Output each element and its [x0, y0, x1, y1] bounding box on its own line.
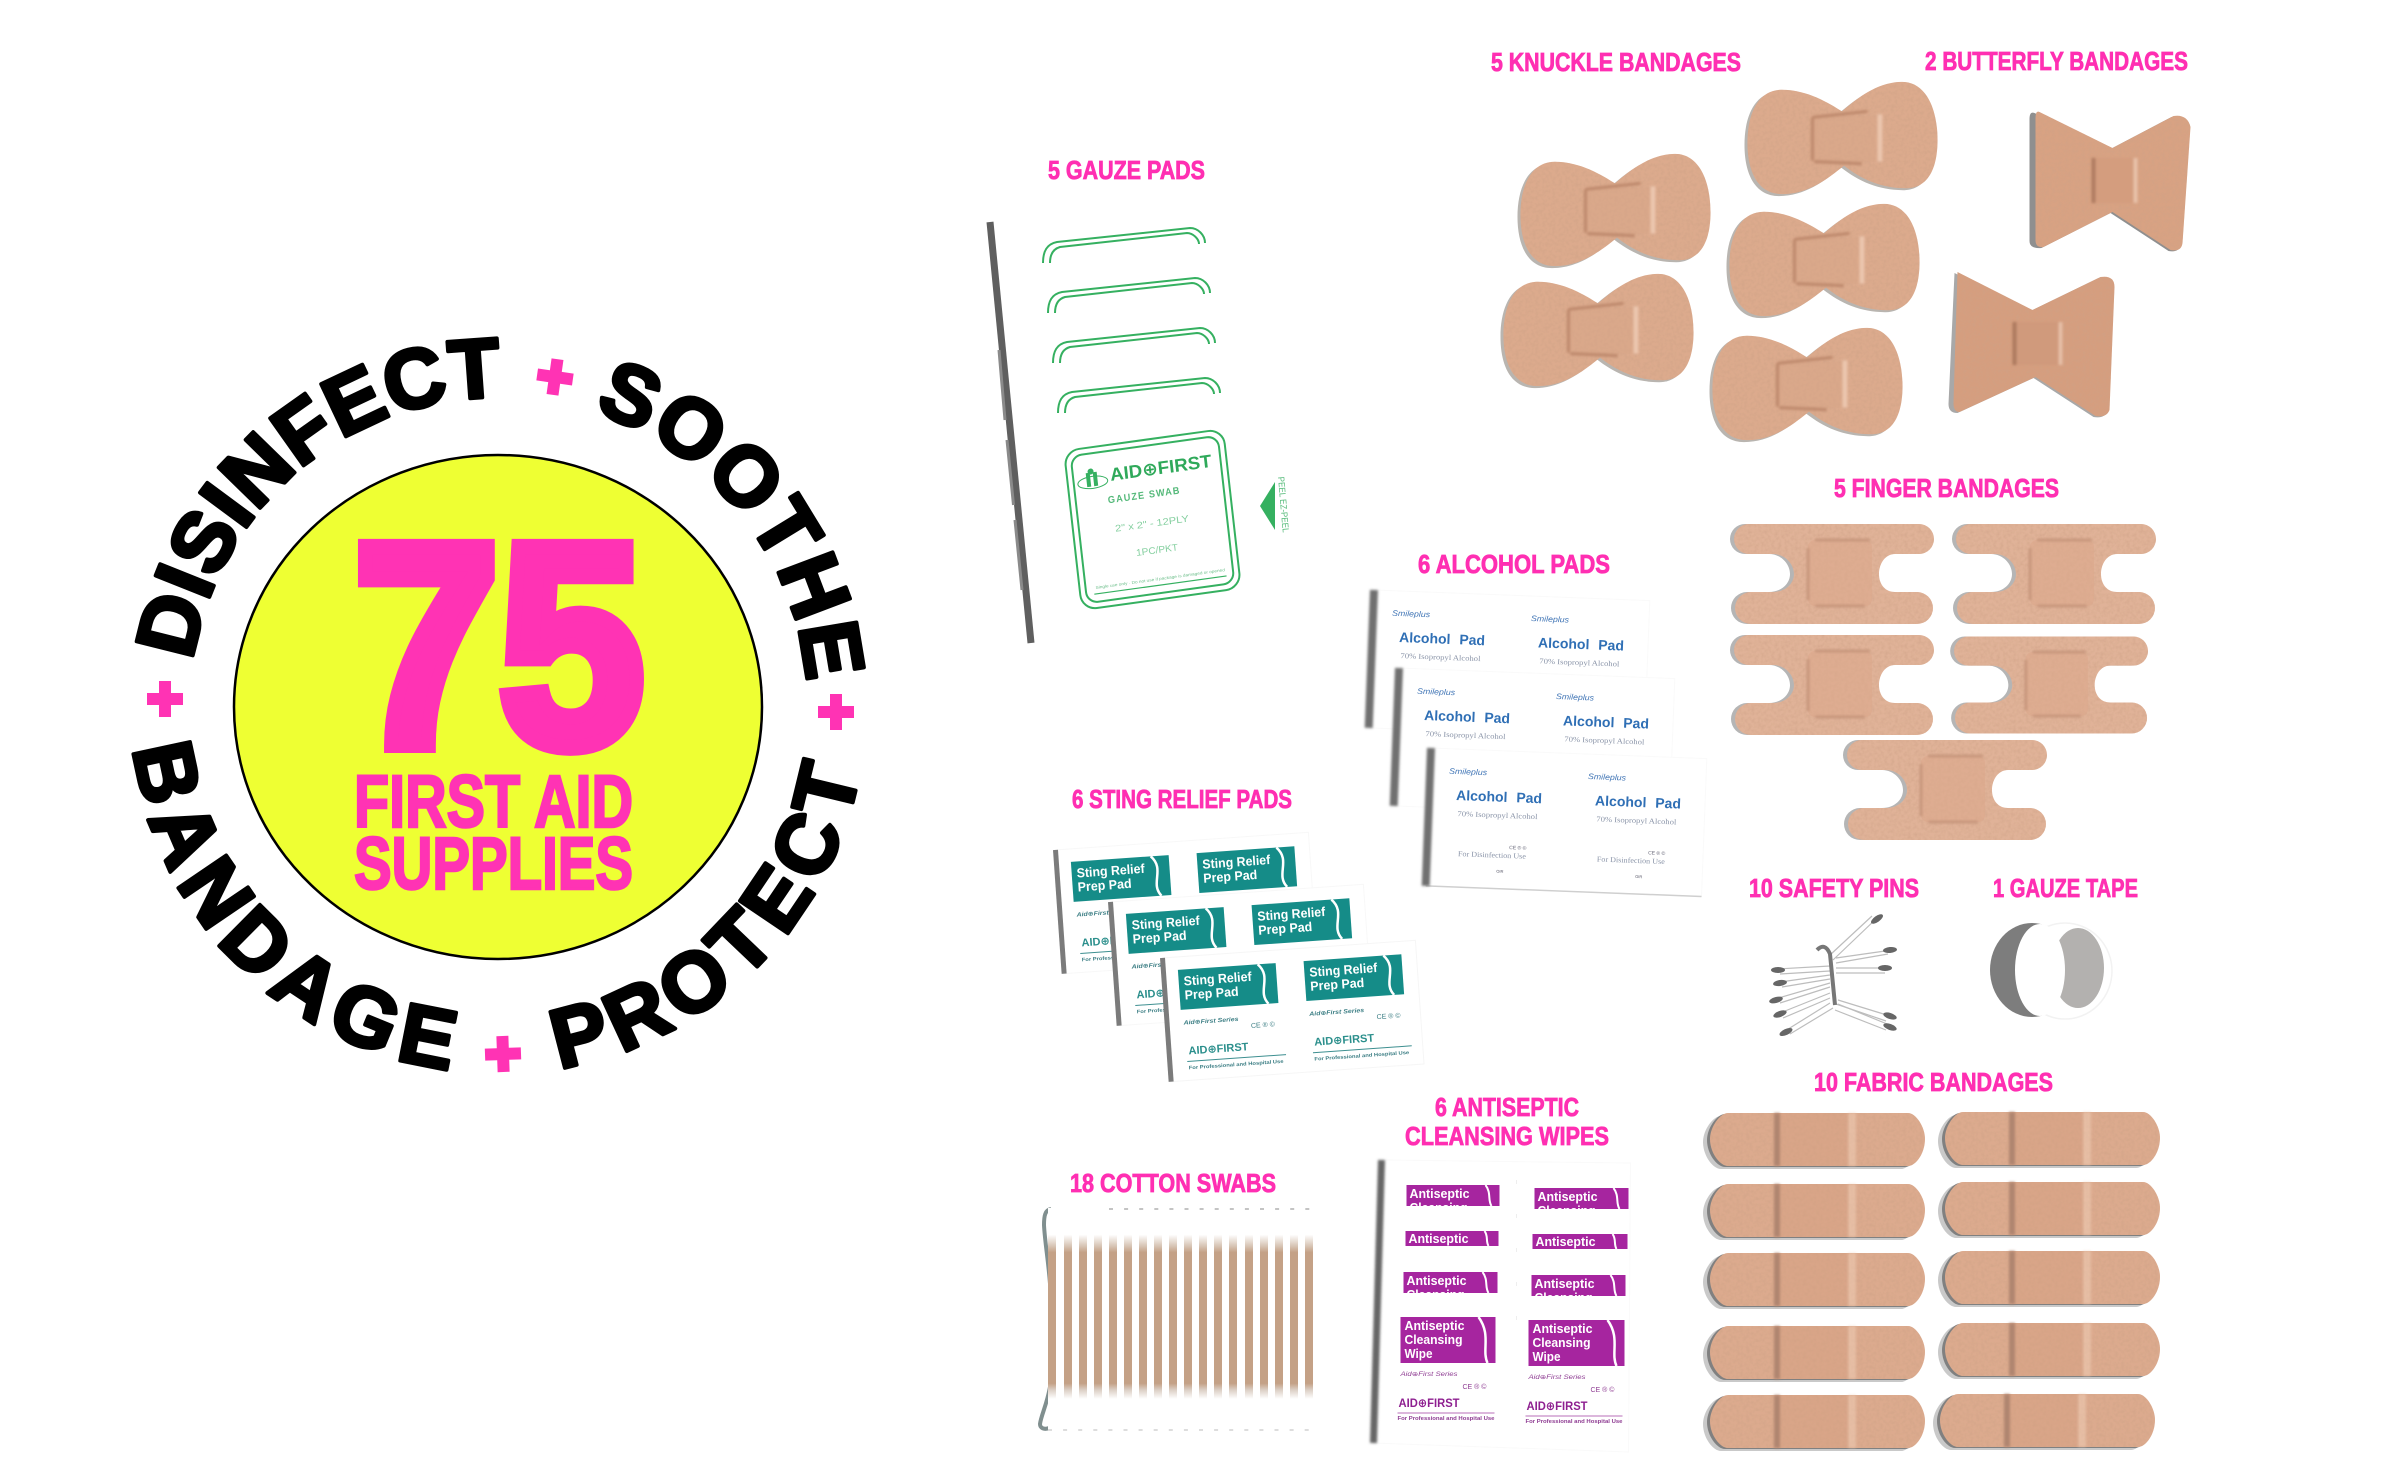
panel: antiseptic wipes [1374, 1092, 1630, 1452]
sting pad strip back [1053, 832, 1317, 974]
butterfly bandage lower [1948, 272, 2114, 417]
gauze label frame: 1PC/PKT [1136, 542, 1179, 559]
magenta label right 3 [1532, 1275, 1626, 1296]
peel text: PEEL EZ-PEEL [1276, 476, 1291, 533]
panel: butterfly bandages [1925, 46, 2190, 417]
fabric bandages group [1703, 1112, 2160, 1451]
badge: 75 first aid supplies [131, 336, 866, 1072]
product footer right [1526, 1375, 1623, 1425]
sting pad strip front: Prep Pad [1184, 984, 1239, 1002]
sting pad strip back: Sting Relief [1076, 861, 1146, 881]
alcohol pad strip back: Alcohol Pad [1399, 629, 1485, 648]
pin bundle [1768, 913, 1898, 1038]
alcohol pad strip front: CE ® © [1648, 849, 1666, 857]
heading: 5 KNUCKLE BANDAGES [1491, 47, 1741, 77]
sting pad strip front: Aid⊕First Series [1182, 1017, 1239, 1027]
magenta label right 4 [1528, 1320, 1624, 1366]
product footer left: Aid⊕First Series [1399, 1372, 1458, 1378]
sting pad strip middle: For Professional and Hospital Use [1137, 1003, 1232, 1015]
alcohol pad strip front: Smileplus [1588, 772, 1626, 783]
product footer right: CE ® © [1590, 1386, 1615, 1394]
alcohol pad strip back [1365, 590, 1650, 738]
sting pad strip middle: Aid⊕First Series [1130, 961, 1187, 971]
alcohol pad strip front: Alcohol Pad [1595, 792, 1681, 812]
gauze label frame: 2" x 2" - 12PLY [1115, 513, 1190, 535]
alcohol pad strip front: Smileplus [1449, 767, 1487, 777]
sting pad strip back: Aid⊕First Series [1075, 909, 1132, 919]
product footer left: For Professional and Hospital Use [1398, 1416, 1495, 1422]
panel: cotton swabs [1040, 1168, 1313, 1430]
peel arrow [1260, 482, 1275, 530]
magenta label left 2: Antiseptic [1408, 1231, 1468, 1246]
alcohol pad strip middle: 70% Isopropyl Alcohol [1425, 729, 1506, 741]
alcohol pad strip front: For Disinfection Use [1458, 849, 1527, 861]
heading line one: 6 ANTISEPTIC [1435, 1092, 1579, 1122]
sting pad strip middle: Sting Relief [1131, 913, 1201, 933]
product footer left: CE ® © [1462, 1383, 1487, 1391]
sting pad strip back: Prep Pad [1077, 876, 1132, 894]
panel: safety pins [1749, 873, 1919, 1038]
panel: sting relief pads [1053, 784, 1424, 1082]
sting pad strip front: Aid⊕First Series [1308, 1008, 1365, 1018]
sting pad strip front: For Professional and Hospital Use [1314, 1050, 1410, 1063]
alcohol pad strip front: For Disinfection Use [1597, 854, 1666, 866]
magenta label right 1: Cleansing [1538, 1203, 1596, 1218]
gauze packet [990, 190, 1303, 644]
wipes packet [1374, 1160, 1630, 1452]
sting pad strip front [1160, 940, 1424, 1082]
product footer right: AID⊕FIRST [1526, 1399, 1588, 1413]
heading: 10 FABRIC BANDAGES [1814, 1067, 2053, 1097]
alcohol pad strip middle: 70% Isopropyl Alcohol [1564, 734, 1645, 746]
heading: 5 FINGER BANDAGES [1834, 473, 2059, 503]
alcohol pad strip middle: Smileplus [1417, 687, 1455, 697]
sting pad strip front: CE ® © [1376, 1011, 1402, 1021]
alcohol pad strip front: 70% Isopropyl Alcohol [1596, 814, 1677, 826]
magenta label right 4: Antiseptic [1532, 1321, 1592, 1336]
heading: 1 GAUZE TAPE [1993, 873, 2138, 903]
magenta label left 4: Cleansing [1404, 1332, 1463, 1347]
alcohol pad strip front: OIR [1635, 874, 1643, 879]
swab bundle [1040, 1208, 1313, 1430]
pink plus: bottom [484, 1035, 522, 1073]
sting pad strip front: Sting Relief [1183, 969, 1253, 989]
knuckle bandages group [1500, 82, 1938, 442]
sting pad strip back: AID⊕FIRST [1081, 933, 1142, 949]
heading: 18 COTTON SWABS [1070, 1168, 1276, 1198]
sting pad strip front: AID⊕FIRST [1188, 1041, 1249, 1057]
magenta label left 4: Antiseptic [1404, 1318, 1464, 1333]
butterfly bandage upper [2030, 112, 2190, 251]
product footer right: Aid⊕First Series [1527, 1375, 1586, 1381]
gauze label frame: AID⊕FIRST [1109, 451, 1213, 485]
tape roll [1990, 923, 2112, 1019]
heading: 5 GAUZE PADS [1048, 155, 1205, 185]
sting pad strip middle: Prep Pad [1132, 928, 1187, 946]
sting pad strip front: CE ® © [1251, 1020, 1276, 1030]
pink plus: right [818, 694, 854, 730]
product footer right: For Professional and Hospital Use [1526, 1419, 1623, 1425]
magenta label right 3: Antiseptic [1534, 1276, 1594, 1291]
sting pad strip middle: AID⊕FIRST [1136, 985, 1197, 1001]
sting pad strip back: For Professional and Hospital Use [1082, 951, 1177, 963]
sting pad strip middle: Sting Relief [1257, 904, 1326, 924]
magenta label left 2 [1406, 1231, 1498, 1246]
magenta label right 4: Wipe [1532, 1349, 1560, 1364]
magenta label right 4: Cleansing [1532, 1335, 1591, 1350]
ring word: disinfect: DISINFECT [134, 336, 500, 658]
panel: gauze tape [1990, 873, 2138, 1019]
finger bandages group [1730, 524, 2156, 840]
number 75: 75 [354, 485, 644, 807]
magenta label right 2: Antiseptic [1536, 1234, 1596, 1249]
magenta label right 3: Cleansing [1534, 1290, 1593, 1305]
sting pad strip middle: Prep Pad [1258, 919, 1313, 938]
pink plus: top [535, 357, 575, 397]
alcohol pad strip middle: Smileplus [1556, 692, 1594, 703]
alcohol pad strip front: CE ® © [1509, 844, 1527, 852]
gauze label frame: GAUZE SWAB [1107, 485, 1181, 506]
alcohol pad strip middle: Alcohol Pad [1424, 707, 1510, 726]
heading: 6 STING RELIEF PADS [1072, 784, 1292, 814]
magenta label right 1 [1534, 1188, 1628, 1209]
ring word: protect: PROTECT [548, 756, 858, 1070]
sting pad strip front: Sting Relief [1309, 960, 1378, 980]
alcohol pad strip back: 70% Isopropyl Alcohol [1539, 656, 1620, 668]
sting pad strip front: Prep Pad [1310, 975, 1365, 994]
pink plus: left [147, 681, 183, 717]
magenta label right 1: Antiseptic [1538, 1189, 1598, 1204]
sting pad strip front: For Professional and Hospital Use [1189, 1059, 1284, 1071]
magenta label left 1: Antiseptic [1410, 1186, 1470, 1201]
panel: fabric bandages [1703, 1067, 2160, 1451]
sting pad strip front: AID⊕FIRST [1314, 1032, 1375, 1049]
magenta label left 3 [1404, 1272, 1498, 1293]
alcohol pad strip front [1422, 748, 1707, 896]
ring word: soothe: SOOTHE [600, 362, 866, 680]
magenta label left 4: Wipe [1404, 1346, 1432, 1361]
yellow circle [234, 455, 762, 959]
alcohol pad strip back: Alcohol Pad [1538, 634, 1624, 654]
supplies text: SUPPLIES [354, 822, 633, 905]
heading line two: CLEANSING WIPES [1405, 1121, 1609, 1151]
alcohol pad strip front: 70% Isopropyl Alcohol [1457, 809, 1538, 821]
panel: alcohol pads [1365, 549, 1707, 896]
magenta label left 3: Cleansing [1406, 1287, 1465, 1302]
alcohol pad strip back: 70% Isopropyl Alcohol [1400, 651, 1481, 663]
alcohol pad strip middle: Alcohol Pad [1563, 712, 1649, 732]
panel: finger bandages [1730, 473, 2156, 840]
alcohol pad strip front: OIR [1496, 869, 1504, 874]
sting pad strip middle [1108, 884, 1372, 1026]
first aid text: FIRST AID [354, 760, 633, 843]
heading: 6 ALCOHOL PADS [1418, 549, 1610, 579]
ring word: bandage: BANDAGE [131, 740, 458, 1072]
magenta label left 3: Antiseptic [1406, 1273, 1466, 1288]
sting pad strip back: Prep Pad [1203, 867, 1258, 886]
alcohol pad strip middle [1390, 668, 1675, 816]
alcohol pad strip back: Smileplus [1531, 614, 1569, 625]
gauze label frame [1064, 429, 1241, 610]
magenta label left 1: Cleansing [1410, 1200, 1468, 1215]
alcohol pad strip back: Smileplus [1392, 609, 1430, 619]
magenta label right 2 [1532, 1234, 1628, 1249]
alcohol pad strip front: Alcohol Pad [1456, 787, 1542, 806]
panel: gauze pads [990, 155, 1303, 644]
product footer left [1398, 1372, 1495, 1422]
heading: 10 SAFETY PINS [1749, 873, 1919, 903]
heading: 2 BUTTERFLY BANDAGES [1925, 46, 2188, 76]
sting pad strip back: Sting Relief [1202, 852, 1271, 872]
magenta label left 4 [1400, 1317, 1496, 1363]
product footer left: AID⊕FIRST [1398, 1396, 1460, 1410]
magenta label left 1 [1406, 1185, 1500, 1206]
gauze label frame: Single use only · Do not use if package is damaged or opened [1095, 567, 1225, 590]
panel: knuckle bandages [1491, 47, 1938, 442]
